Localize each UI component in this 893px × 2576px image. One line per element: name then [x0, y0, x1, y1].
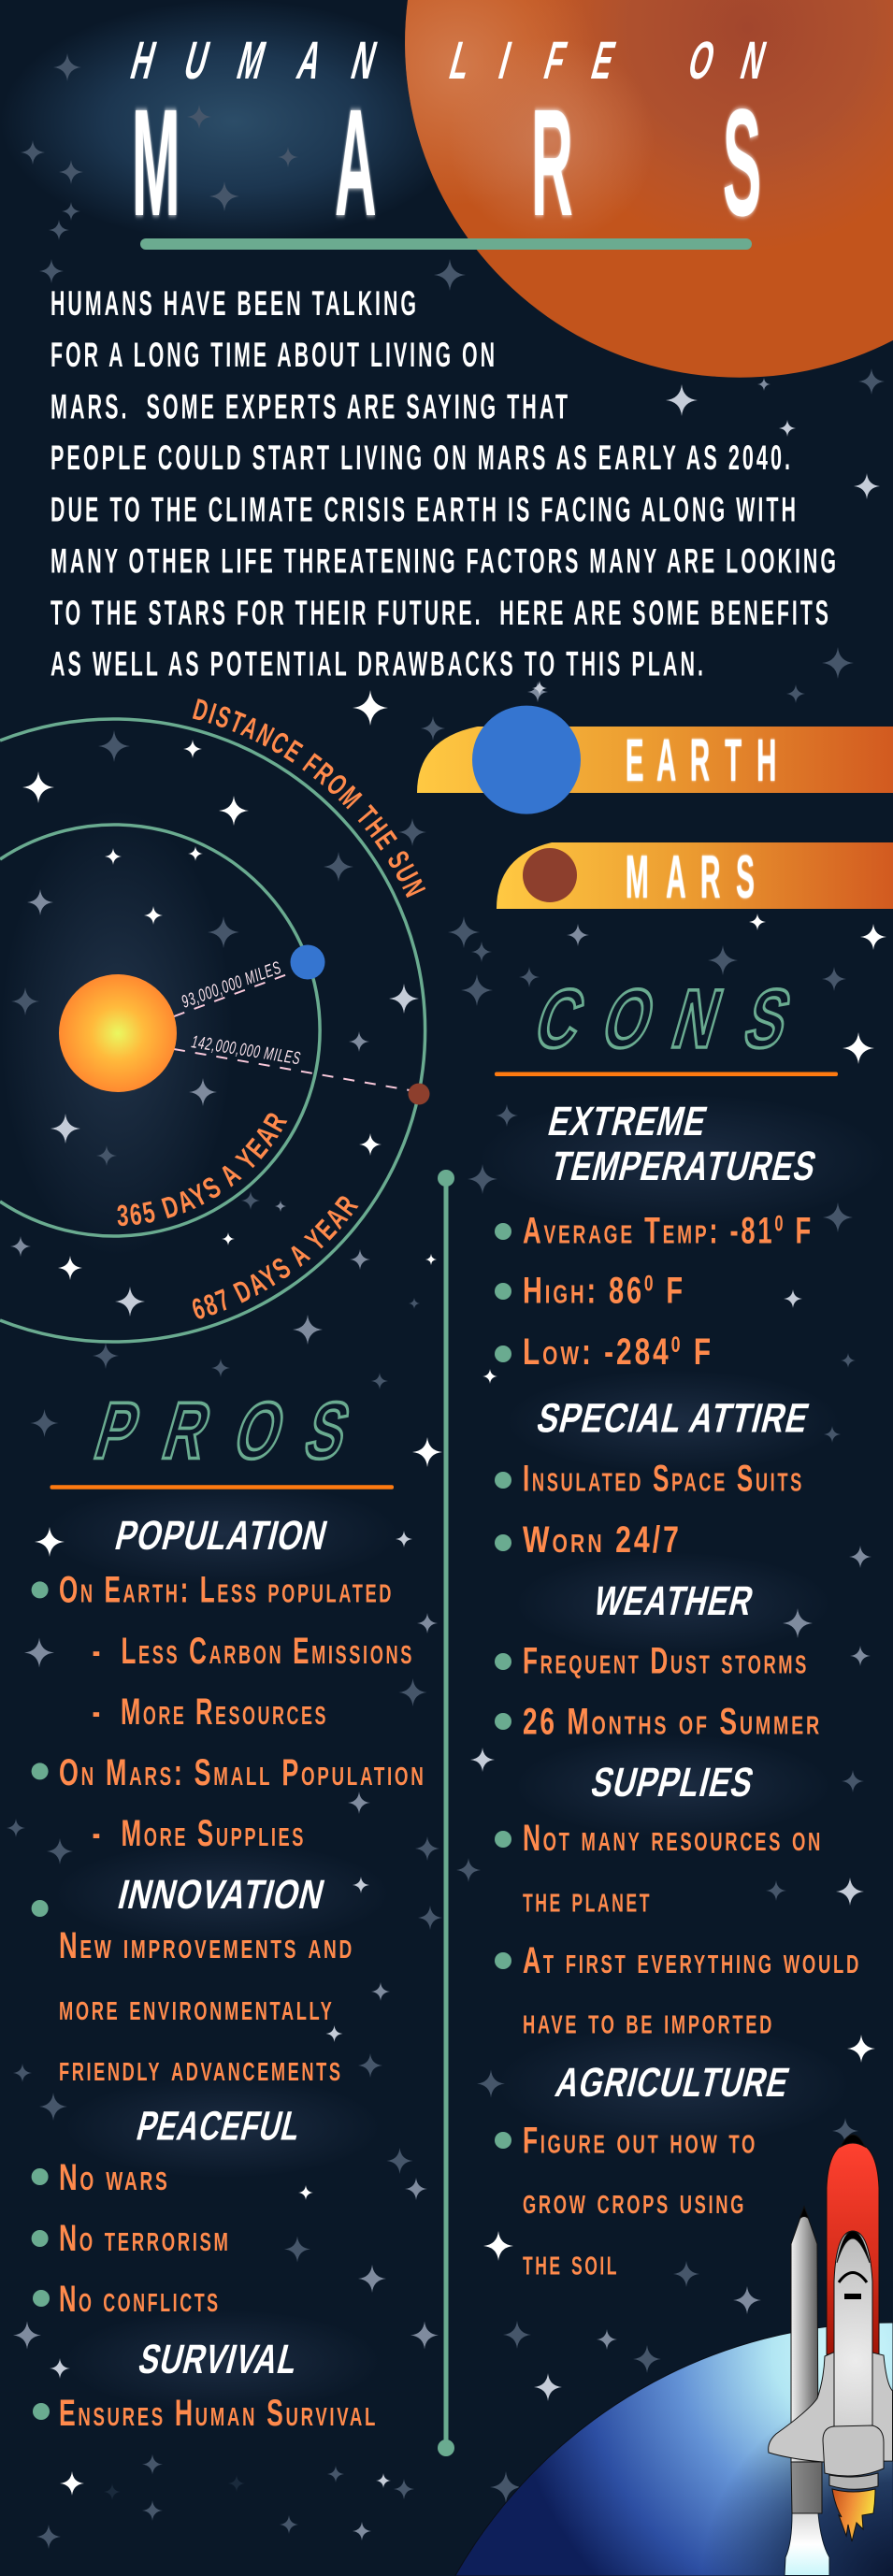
section: peaceful: No wars	[59, 2157, 170, 2198]
section: survival: Ensures Human Survival	[59, 2393, 378, 2434]
solar system diagram	[0, 698, 430, 1344]
fuel tank	[827, 2142, 879, 2354]
heading: pros: PROS	[86, 1387, 359, 1476]
planet: large mars	[405, 0, 893, 378]
pros underline	[50, 1485, 394, 1489]
section: extreme temperatures: 0	[671, 1332, 684, 1358]
mars orbit	[0, 719, 425, 1342]
icon: earth	[472, 706, 581, 814]
section: innovation: more environmentally	[59, 1987, 335, 2028]
section: peaceful: No conflicts	[59, 2279, 221, 2320]
section: agriculture: the soil	[523, 2242, 619, 2283]
section: supplies: the planet	[523, 1879, 652, 1921]
title line: human life on: HUMAN LIFE ON	[124, 31, 771, 91]
icon: mars	[408, 1083, 430, 1105]
section: extreme temperatures: EXTREME	[544, 1100, 713, 1144]
section: population: POPULATION	[111, 1514, 333, 1559]
section: special attire: SPECIAL ATTIRE	[533, 1396, 814, 1442]
section: special attire: Worn 24/7	[523, 1519, 682, 1561]
section: extreme temperatures: 0	[774, 1211, 785, 1236]
section: population	[32, 1514, 426, 1854]
orbiter body	[834, 2231, 872, 2426]
section: extreme temperatures: F	[655, 1271, 685, 1312]
banner label: earth: EARTH	[626, 727, 776, 794]
title	[124, 31, 771, 249]
section: extreme temperatures	[495, 1100, 822, 1373]
section: extreme temperatures: F	[684, 1331, 713, 1373]
section: peaceful: PEACEFUL	[133, 2104, 307, 2149]
flame	[832, 2489, 875, 2541]
earth banner	[417, 706, 893, 814]
section: population: - More Resources	[93, 1691, 328, 1733]
cockpit window	[839, 2272, 867, 2282]
section: special attire	[495, 1396, 814, 1561]
title underline	[140, 238, 752, 250]
section: agriculture	[495, 2060, 795, 2283]
section: supplies: SUPPLIES	[587, 1761, 759, 1806]
section: survival	[33, 2338, 378, 2434]
booster	[791, 2207, 818, 2462]
section: population: On Mars: Small Population	[59, 1752, 426, 1793]
curved label: distance from the sun: DISTANCE FROM THE SUN	[193, 698, 426, 898]
section: extreme temperatures: High: 86	[523, 1271, 691, 1312]
section: population: - Less Carbon Emissions	[93, 1631, 414, 1672]
section: innovation: friendly advancements	[59, 2048, 343, 2089]
section: innovation: New improvements and	[59, 1925, 354, 1966]
section: weather: WEATHER	[589, 1579, 758, 1624]
intro paragraph: HUMANS HAVE BEEN TALKING	[50, 284, 419, 323]
mars banner	[497, 842, 893, 911]
cons underline	[495, 1072, 838, 1076]
panel: pros	[32, 1387, 426, 2434]
icon: space shuttle	[769, 2135, 892, 2575]
section: extreme temperatures: 0	[644, 1272, 655, 1297]
section: peaceful: No terrorism	[59, 2218, 231, 2259]
section: extreme temperatures: Average Temp: -81	[523, 1210, 891, 1251]
section: innovation	[32, 1873, 354, 2089]
intro paragraph: FOR A LONG TIME ABOUT LIVING ON	[50, 336, 497, 374]
title word: mars: MARS	[132, 78, 761, 249]
exhaust	[785, 2513, 829, 2575]
section: innovation: INNOVATION	[114, 1873, 330, 1918]
label: mars distance: 142,000,000 MILES	[190, 1032, 302, 1069]
earth orbit	[0, 825, 320, 1236]
section: weather	[495, 1579, 822, 1743]
distance line to earth	[174, 973, 291, 1016]
icon: earth	[290, 944, 325, 980]
label: earth distance: 93,000,000 MILES	[180, 958, 284, 1013]
section: agriculture: AGRICULTURE	[552, 2060, 795, 2106]
section: population: On Earth: Less populated	[59, 1570, 394, 1611]
icon: mars	[523, 848, 577, 902]
planet: earth horizon	[455, 2323, 893, 2576]
panel: cons	[495, 972, 861, 2283]
section: agriculture: grow crops using	[523, 2180, 746, 2222]
section: extreme temperatures: F	[785, 1210, 814, 1251]
distance line to mars	[174, 1049, 410, 1090]
section: supplies	[495, 1761, 861, 2042]
wings	[769, 2353, 892, 2462]
banner label: mars: MARS	[626, 842, 755, 911]
section: survival: SURVIVAL	[135, 2338, 304, 2382]
section: population: - More Supplies	[93, 1813, 306, 1854]
icon: sun	[59, 974, 177, 1092]
section: peaceful	[32, 2104, 307, 2320]
curved label: 687 days a year: 687 DAYS A YEAR	[193, 1196, 359, 1318]
center divider	[438, 1170, 454, 2456]
section: agriculture: Figure out how to	[523, 2121, 757, 2162]
intro paragraph	[50, 284, 839, 684]
curved label: 365 days a year: 365 DAYS A YEAR	[117, 1113, 288, 1227]
heading: cons: CONS	[526, 972, 800, 1065]
section: extreme temperatures: Low: -284	[523, 1331, 722, 1373]
engine block	[823, 2425, 884, 2476]
